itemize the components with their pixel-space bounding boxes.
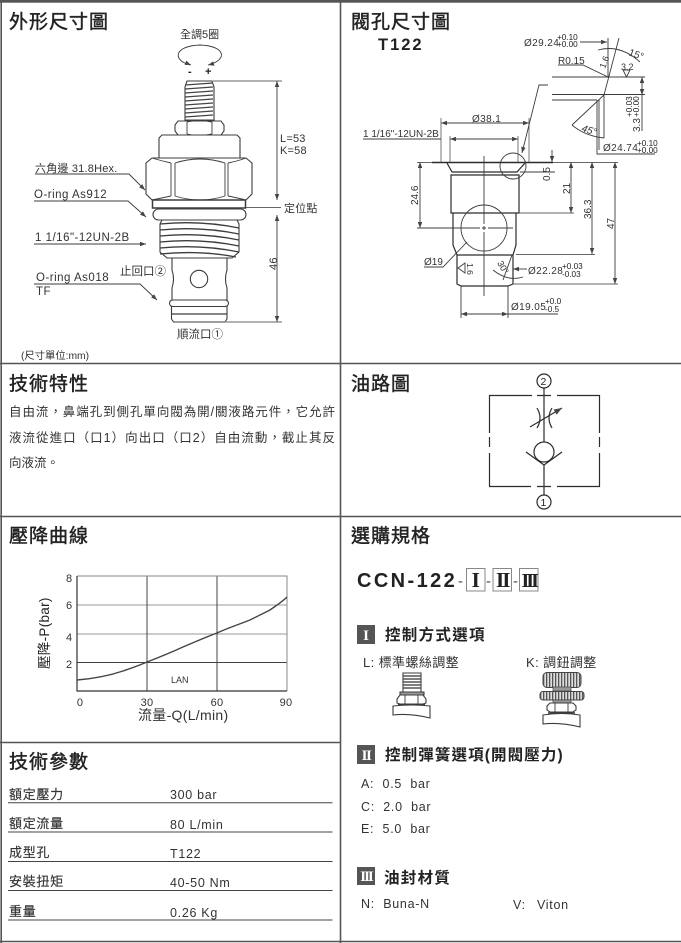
icon: knob adjustment <box>540 672 584 727</box>
overall length dimension: K=58 <box>280 145 307 157</box>
option III: seal material: III <box>360 869 374 885</box>
groove detail: +0.03 <box>625 96 634 117</box>
depth dimensions: 47 <box>606 217 617 229</box>
callout: thread: 1 1/16"-12UN-2B <box>35 232 130 244</box>
panel: technical parameters <box>8 751 332 920</box>
parameter table: 80 L/min <box>170 818 224 832</box>
circuit symbol <box>490 374 600 509</box>
parameter table <box>8 787 332 920</box>
adjustment rotation indicator: 全調5圈 <box>180 28 219 41</box>
line chart: 0 <box>77 697 83 709</box>
depth dimensions: 0.5 <box>542 167 553 181</box>
parameter table: 成型孔 <box>9 845 50 860</box>
line chart <box>37 573 292 723</box>
heading: hydraulic circuit: 油路圖 <box>351 373 411 395</box>
groove detail: 15° <box>627 47 645 63</box>
groove detail: 3.3 <box>632 118 643 132</box>
cavity section drawing <box>417 153 553 318</box>
panel: technical features <box>9 373 335 470</box>
option I: control method <box>357 625 597 727</box>
overall length dimension: L=53 <box>280 133 306 145</box>
callout: hex size <box>35 161 145 190</box>
groove detail: R0.15 <box>558 56 585 67</box>
groove detail: 3.2 <box>621 62 634 72</box>
parameter table: 300 bar <box>170 788 217 802</box>
groove detail: +0.10 <box>557 33 578 42</box>
groove detail: Ø24.74 <box>603 143 638 154</box>
model code: I <box>472 568 480 592</box>
groove detail: Ø29.24 <box>524 38 559 49</box>
panel: outline dimensions <box>9 11 318 362</box>
option III: seal material: N: Buna-N <box>361 897 430 911</box>
option III: seal material: Viton <box>537 898 569 912</box>
groove detail: +0.00 <box>637 146 658 155</box>
dimension: 38.1 diameter: Ø38.1 <box>472 114 501 125</box>
depth dimensions <box>410 150 618 284</box>
dimension: 19.05 diameter: -0.5 <box>545 305 560 314</box>
option I: control method: K: 調鈕調整 <box>526 655 597 670</box>
dimension: 19.05 diameter: Ø19.05 <box>511 302 546 313</box>
surface finish and 30 degree note <box>458 255 527 280</box>
callout: O-ring As912 <box>34 189 146 217</box>
model code: - <box>486 573 491 590</box>
option I: control method: I <box>363 628 369 644</box>
option II: spring options: II <box>362 748 372 764</box>
dimension: 19.05 diameter: +0.0 <box>545 297 562 306</box>
dimension: thread: 1 1/16"-12UN-2B <box>363 129 439 140</box>
cavity code: T122 <box>378 36 424 54</box>
option III: seal material: 油封材質 <box>384 868 451 887</box>
dimension: 22.28 diameter: -0.03 <box>562 270 581 279</box>
dimension: 22.28 diameter: Ø22.28 <box>528 266 563 277</box>
line chart: 4 <box>66 632 72 644</box>
line chart: 30 <box>141 697 153 709</box>
port 1 label: 順流口① <box>177 327 223 341</box>
heading: technical features: 技術特性 <box>9 373 89 395</box>
panel: hydraulic circuit <box>351 373 600 509</box>
description text: 向液流。 <box>9 455 59 470</box>
callout: O-ring As018: TF <box>36 286 51 298</box>
line chart: 壓降-P(bar) <box>37 597 52 669</box>
dimension: 22.28 diameter <box>528 262 583 279</box>
model code <box>357 568 539 592</box>
description text: 液流從進口（口1）向出口（口2）自由流動，截止其反 <box>9 430 335 445</box>
detail leader <box>522 85 548 153</box>
unit note: (尺寸單位:mm) <box>21 349 89 362</box>
dimension: 19.05 diameter <box>461 297 562 314</box>
model code: III <box>522 570 539 592</box>
parameter table: T122 <box>170 847 201 861</box>
option II: spring options: 控制彈簧選項(開閥壓力) <box>385 745 564 764</box>
option II: spring options: A: 0.5 bar <box>361 777 431 791</box>
groove detail: +0.00 <box>632 96 641 117</box>
parameter table: 40-50 Nm <box>170 876 230 890</box>
description text <box>9 404 335 470</box>
model code: CCN-122 <box>357 570 457 592</box>
circuit symbol: 1 <box>540 497 546 509</box>
line chart: 2 <box>66 659 72 671</box>
heading: pressure drop curve: 壓降曲線 <box>9 525 89 547</box>
dimension: 22.28 diameter: +0.03 <box>562 262 583 271</box>
line chart: 6 <box>66 600 72 612</box>
callout: O-ring As018 <box>34 272 157 300</box>
adjustment rotation indicator: + <box>205 66 211 78</box>
model code: II <box>496 568 510 592</box>
parameter table: 額定壓力 <box>9 787 64 802</box>
heading: ordering specification: 選購規格 <box>351 525 431 547</box>
groove detail: +0.10 <box>637 139 658 148</box>
groove detail: 1.6 <box>597 55 611 70</box>
panel: pressure drop curve <box>9 525 292 723</box>
icon: screw adjustment <box>393 673 430 718</box>
port 2 label: 止回口② <box>120 265 166 278</box>
option II: spring options: E: 5.0 bar <box>361 822 431 836</box>
adjustment rotation indicator <box>178 28 221 78</box>
line chart: 90 <box>280 697 292 709</box>
callout: hex size: 六角邊 31.8Hex. <box>35 161 117 175</box>
option I: control method: 控制方式選項 <box>385 625 486 644</box>
overall length dimension: 46 <box>268 257 280 270</box>
model code: - <box>458 573 463 590</box>
circuit symbol: 2 <box>540 376 546 388</box>
line chart: LAN <box>171 675 189 685</box>
option I: control method: L: 標準螺絲調整 <box>363 655 459 670</box>
line chart: 流量-Q(L/min) <box>138 707 228 723</box>
line chart: 60 <box>211 697 223 709</box>
heading: technical parameters: 技術參數 <box>9 751 89 773</box>
panel: cavity dimensions <box>351 11 658 318</box>
callout: O-ring As018: O-ring As018 <box>36 272 109 284</box>
depth dimensions: 36.3 <box>583 199 594 219</box>
groove detail <box>524 33 658 155</box>
callout: O-ring As912: O-ring As912 <box>34 189 107 201</box>
groove detail: 45° <box>580 123 598 139</box>
option III: seal material: V: <box>513 898 526 912</box>
parameter table: 0.26 Kg <box>170 906 218 920</box>
parameter table: 重量 <box>9 904 36 919</box>
valve outline drawing <box>146 81 252 322</box>
groove detail: +0.00 <box>557 40 578 49</box>
parameter table: 額定流量 <box>9 816 64 831</box>
dimension: 38.1 diameter <box>441 114 529 162</box>
dimension: 19 diameter: Ø19 <box>424 257 443 268</box>
description text: 自由流，鼻端孔到側孔單向閥為開/關液路元件，它允許 <box>9 404 335 419</box>
dimension: 19 diameter <box>424 242 467 268</box>
parameter table: 安裝扭矩 <box>9 874 64 889</box>
dimension: thread <box>363 129 518 162</box>
heading: outline dimensions: 外形尺寸圖 <box>9 11 109 33</box>
panel: ordering specification <box>351 525 597 912</box>
option II: spring options <box>357 745 564 836</box>
depth dimensions: 21 <box>562 182 573 194</box>
model code: - <box>513 573 518 590</box>
option III: seal material <box>357 867 569 912</box>
adjustment rotation indicator: - <box>188 66 192 78</box>
surface finish and 30 degree note: 1.6 <box>465 263 475 275</box>
surface finish and 30 degree note: 30° <box>495 259 511 276</box>
overall length dimension: 定位點 <box>284 201 318 215</box>
line chart: 8 <box>66 573 72 585</box>
option II: spring options: C: 2.0 bar <box>361 800 431 814</box>
overall length dimension <box>213 81 318 322</box>
depth dimensions: 24.6 <box>410 185 421 205</box>
heading: cavity dimensions: 閥孔尺寸圖 <box>351 11 451 33</box>
